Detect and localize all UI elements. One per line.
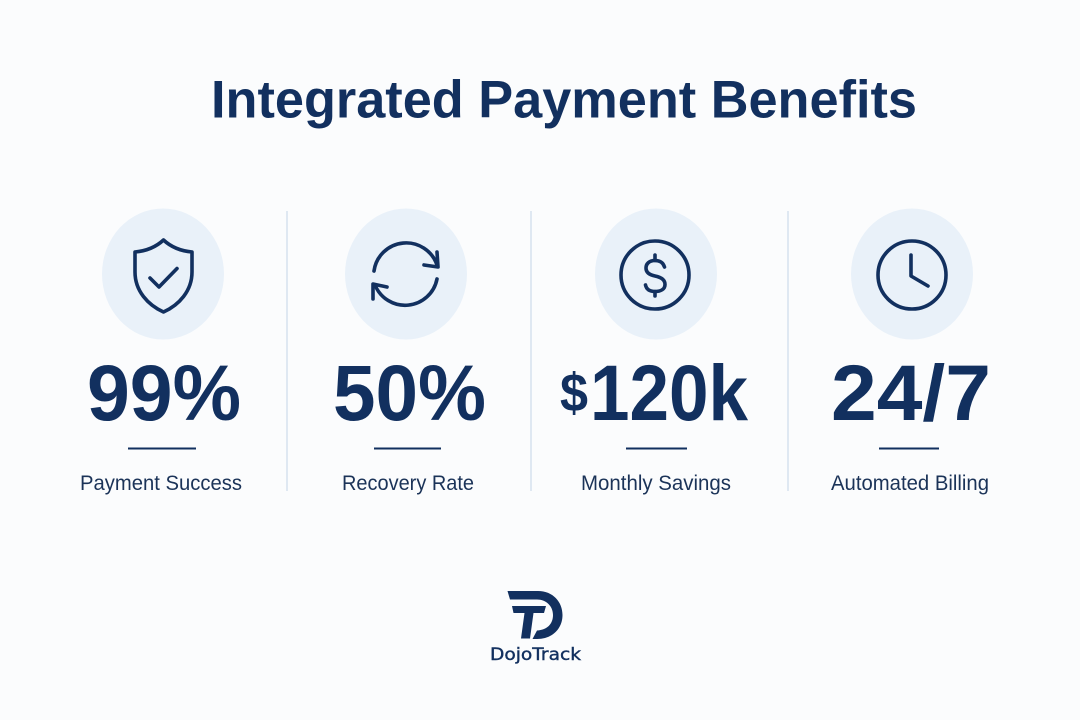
wordmark: DojoTrack xyxy=(490,645,582,664)
panel: automated billing xyxy=(831,208,991,495)
label: payment success: Payment Success xyxy=(80,472,242,495)
panel: payment success xyxy=(80,208,242,495)
icon: circular arrows xyxy=(345,208,467,340)
stat: 99%: 99% xyxy=(87,348,241,437)
label: monthly savings: Monthly Savings xyxy=(581,472,731,495)
stat: $120k: $ xyxy=(560,363,588,423)
stat: $120k: 120k xyxy=(590,348,749,437)
stat: 24/7: 24/7 xyxy=(831,348,991,437)
icon: dollar coin xyxy=(595,208,717,340)
panel: monthly savings xyxy=(560,208,749,495)
stat: 50%: 50% xyxy=(333,348,486,437)
label: automated billing: Automated Billing xyxy=(831,472,989,495)
icon: TD monogram xyxy=(508,591,562,639)
title: Integrated Payment Benefits xyxy=(211,70,917,130)
logo: DojoTrack xyxy=(490,591,582,664)
panel: recovery rate xyxy=(333,208,486,495)
icon: clock xyxy=(851,208,973,340)
icon: shield with check xyxy=(102,208,224,340)
label: recovery rate: Recovery Rate xyxy=(342,472,474,495)
